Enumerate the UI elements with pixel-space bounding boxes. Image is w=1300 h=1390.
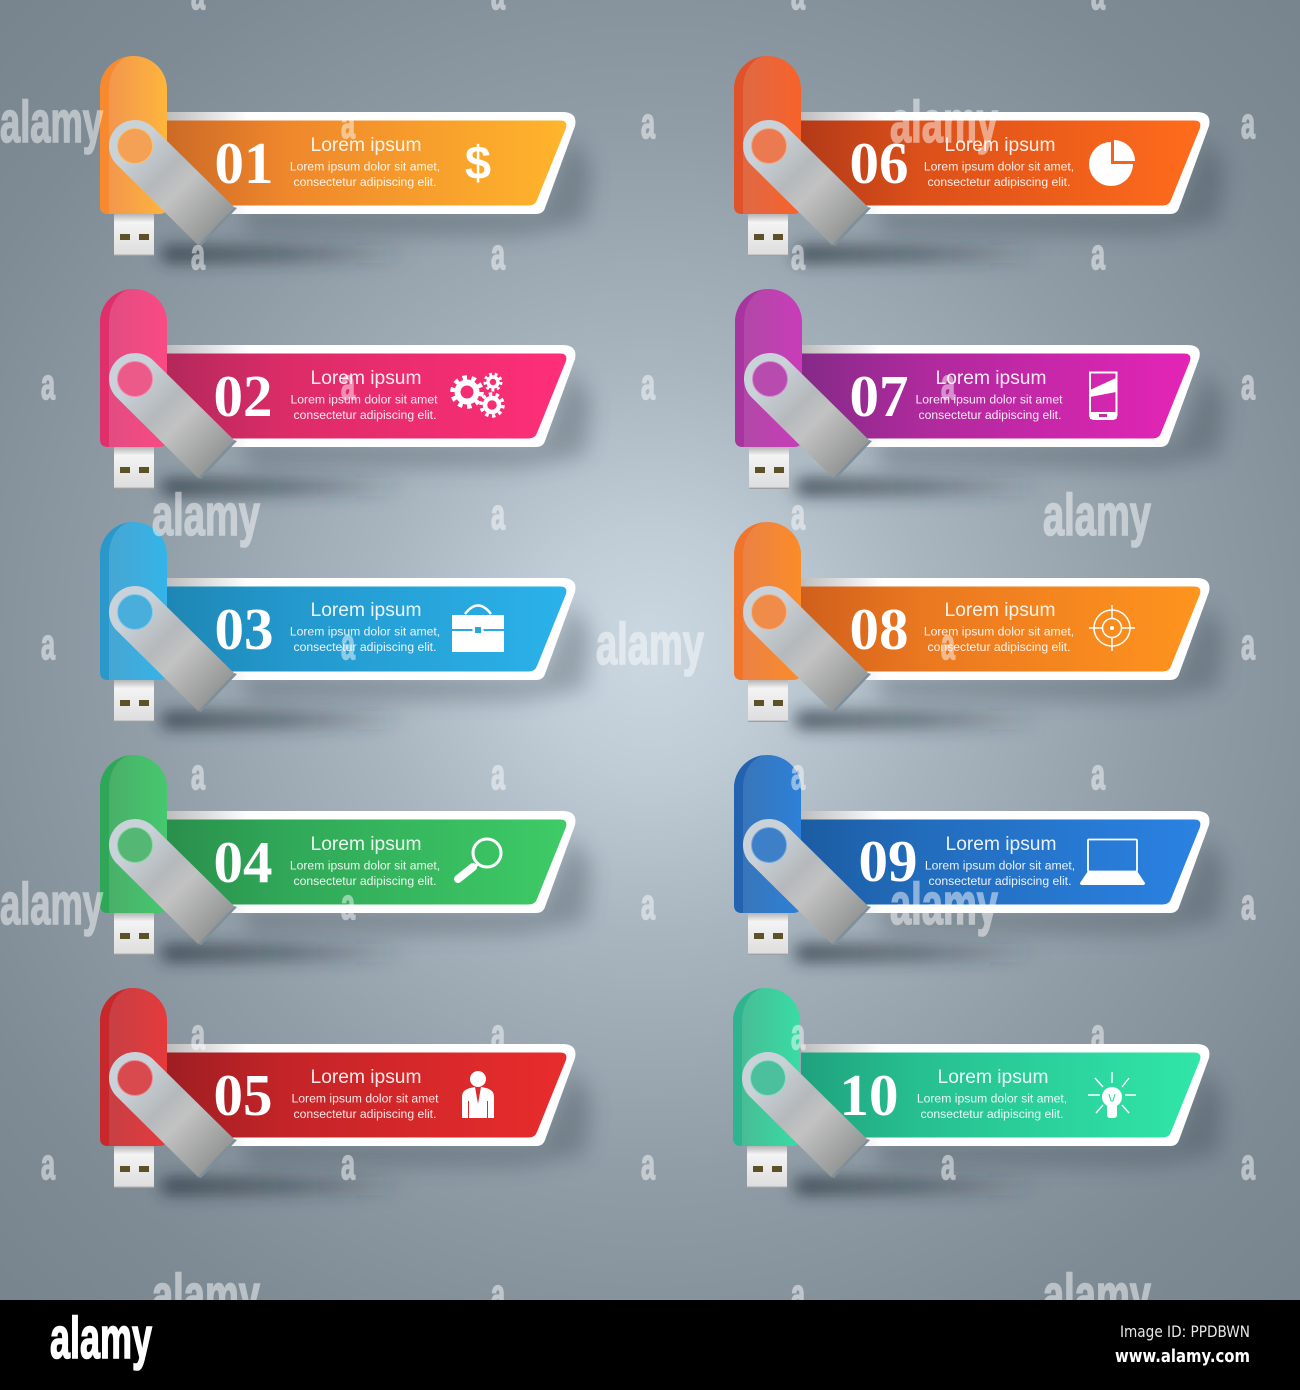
watermark pattern: a [341,880,355,929]
card 02 [100,289,592,496]
text block: consectetur adipiscing elit. [919,408,1061,422]
card 09 [734,755,1226,962]
watermark pattern: a [41,360,55,409]
text block: Lorem ipsum [945,135,1055,156]
watermark pattern: alamy [1043,1263,1151,1328]
text block: Lorem ipsum [311,600,421,621]
watermark pattern: a [1091,750,1105,799]
icon: dollar: $ [465,136,491,189]
watermark pattern: a [941,1140,955,1189]
text block [916,368,1063,422]
watermark pattern: a [41,620,55,669]
icon: pie chart [1089,140,1135,186]
watermark pattern: a [491,1010,505,1059]
watermark pattern: alamy [890,872,998,937]
image id: Image ID: PPDBWN [1120,1322,1250,1341]
watermark pattern: a [1241,620,1255,669]
card 01 [100,56,592,263]
watermark pattern: a [1091,1010,1105,1059]
watermark pattern: a [641,99,655,148]
footer bar [0,1300,1300,1390]
text block: consectetur adipiscing elit. [294,175,436,189]
watermark pattern: a [191,1010,205,1059]
watermark pattern: a [1241,880,1255,929]
text block: Lorem ipsum dolor sit amet [292,1092,439,1106]
text block: consectetur adipiscing elit. [921,1107,1063,1121]
number 07: 07 [850,363,908,429]
number 08: 08 [850,596,908,662]
text block: consectetur adipiscing elit. [294,1107,436,1121]
watermark pattern: a [1091,230,1105,279]
icon: person [462,1071,494,1118]
watermark pattern: a [791,1270,805,1319]
number 06: 06 [850,130,908,196]
watermark pattern: a [491,230,505,279]
card 05 [100,988,592,1195]
watermark pattern: a [1241,360,1255,409]
number 10: 10 [840,1062,898,1128]
text block: Lorem ipsum dolor sit amet, [290,858,440,872]
text block: Lorem ipsum dolor sit amet [916,392,1063,406]
watermark pattern: a [641,880,655,929]
card 06 [734,56,1226,263]
text block: Lorem ipsum dolor sit amet, [290,624,440,638]
icon: phone [1090,372,1116,419]
text block: Lorem ipsum [311,834,421,855]
text block: Lorem ipsum [946,834,1056,855]
watermark pattern: a [191,230,205,279]
watermark pattern: a [491,1270,505,1319]
text block [291,368,438,422]
icon: laptop [1080,840,1145,885]
text block: Lorem ipsum [938,1067,1048,1088]
card 10 [733,988,1225,1195]
watermark pattern: a [491,750,505,799]
text block [290,600,440,654]
watermark pattern: a [791,750,805,799]
text block: consectetur adipiscing elit. [929,874,1071,888]
watermark pattern: a [341,620,355,669]
text block: consectetur adipiscing elit. [294,640,436,654]
text block: Lorem ipsum [311,135,421,156]
text block: Lorem ipsum dolor sit amet, [290,160,440,174]
text block: Lorem ipsum [311,1067,421,1088]
number 03: 03 [214,596,274,662]
watermark pattern: a [941,360,955,409]
watermark pattern: alamy [0,90,103,155]
text block: Lorem ipsum dolor sit amet [291,392,438,406]
number 05: 05 [214,1062,272,1128]
text block: Lorem ipsum [945,600,1055,621]
watermark pattern: a [641,360,655,409]
number 02: 02 [214,363,272,429]
text block: Lorem ipsum [311,368,421,389]
card 07 [735,289,1227,496]
watermark pattern: alamy [152,483,260,548]
card 04 [100,755,592,962]
text block: consectetur adipiscing elit. [294,874,436,888]
watermark pattern: a [941,620,955,669]
text block: Lorem ipsum dolor sit amet, [917,1092,1067,1106]
text block [924,600,1074,654]
text block: consectetur adipiscing elit. [294,408,436,422]
text block [290,135,440,189]
number 01: 01 [214,130,274,196]
number 09: 09 [858,828,918,894]
text block: consectetur adipiscing elit. [928,640,1070,654]
watermark pattern: alamy [596,612,704,677]
icon: briefcase [452,606,504,652]
watermark pattern: alamy [890,90,998,155]
watermark pattern: a [341,1140,355,1189]
text block [292,1067,439,1121]
watermark pattern: alamy [0,872,103,937]
watermark pattern: a [1241,1140,1255,1189]
card 03 [100,522,592,729]
watermark pattern: a [341,360,355,409]
icon: gears [452,374,503,416]
text block [925,834,1075,888]
watermark pattern: alamy [152,1263,260,1328]
watermark pattern: a [791,490,805,539]
text block [290,834,440,888]
watermark pattern: a [791,230,805,279]
text block: Lorem ipsum dolor sit amet, [924,624,1074,638]
card 08 [734,522,1226,729]
text block: consectetur adipiscing elit. [928,175,1070,189]
icon: light bulb [1088,1072,1136,1118]
watermark pattern: alamy [1043,483,1151,548]
watermark pattern: a [1241,99,1255,148]
text block: Lorem ipsum [936,368,1046,389]
website: www.alamy.com [1115,1346,1250,1367]
text block [924,135,1074,189]
text block: Lorem ipsum dolor sit amet, [924,160,1074,174]
watermark pattern: a [341,99,355,148]
footer logo: alamy [50,1306,152,1371]
icon: target [1089,605,1135,651]
text block [917,1067,1067,1121]
icon: magnifier [458,839,501,879]
watermark pattern: a [791,1010,805,1059]
watermark pattern: a [641,1140,655,1189]
text block: Lorem ipsum dolor sit amet, [925,858,1075,872]
watermark pattern: a [491,490,505,539]
watermark pattern: a [191,750,205,799]
number 04: 04 [214,829,272,895]
watermark pattern: a [41,1140,55,1189]
